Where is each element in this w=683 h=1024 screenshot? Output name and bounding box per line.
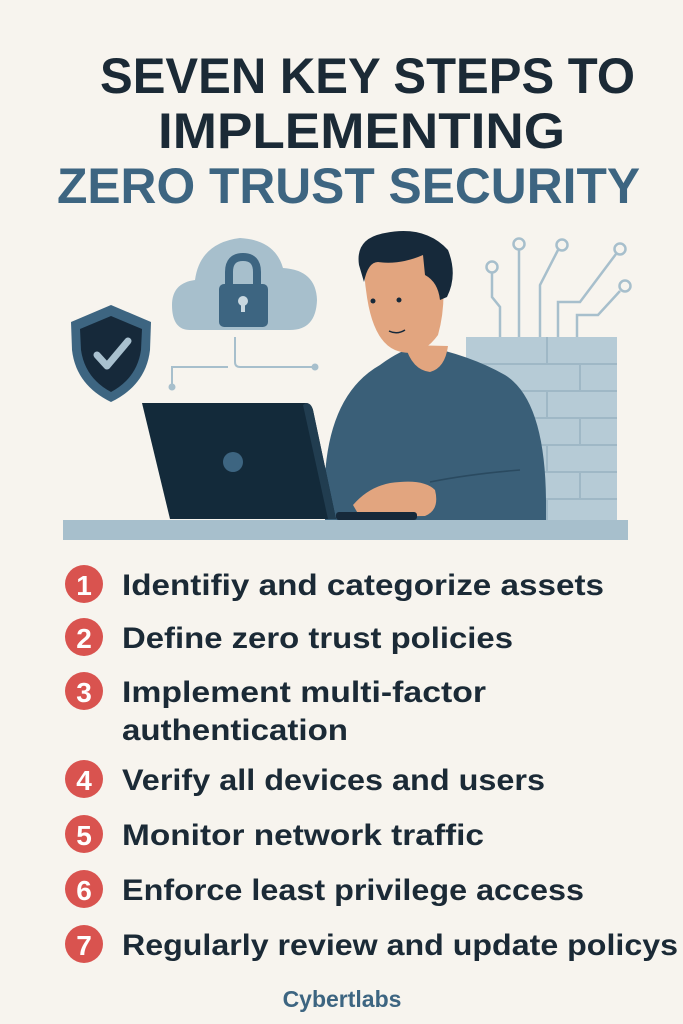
step 3	[65, 672, 486, 747]
icon: cloud lock	[172, 238, 317, 330]
title: SEVEN KEY STEPS TO	[100, 48, 635, 104]
laptop	[142, 403, 336, 519]
person	[324, 231, 546, 520]
title	[57, 48, 640, 214]
step 7: 7	[76, 930, 92, 961]
step 4: 4	[76, 765, 92, 796]
step 3: Implement multi-factor	[122, 676, 486, 709]
circuit lines from cloud	[170, 337, 318, 390]
step 3: authentication	[122, 714, 348, 747]
step 5: 5	[76, 820, 92, 851]
step 5	[65, 815, 484, 853]
step 6: 6	[76, 875, 92, 906]
title: IMPLEMENTING	[158, 103, 565, 159]
step 3: 3	[76, 677, 92, 708]
step 5: Monitor network traffic	[122, 819, 484, 852]
desk	[63, 520, 628, 540]
step 2: Define zero trust policies	[122, 622, 513, 655]
brick wall	[466, 337, 617, 520]
step 4: Verify all devices and users	[122, 764, 545, 797]
footer brand: Cybertlabs	[283, 986, 401, 1012]
title: ZERO TRUST SECURITY	[57, 158, 640, 214]
icon: shield	[71, 305, 151, 402]
illustration	[63, 231, 630, 540]
circuit pins	[486, 238, 630, 337]
steps list	[65, 565, 678, 963]
step 1: 1	[76, 570, 92, 601]
step 6: Enforce least privilege access	[122, 874, 584, 907]
step 2	[65, 618, 513, 656]
step 1: Identifiy and categorize assets	[122, 569, 604, 602]
step 2: 2	[76, 623, 92, 654]
step 7: Regularly review and update policys	[122, 929, 678, 962]
